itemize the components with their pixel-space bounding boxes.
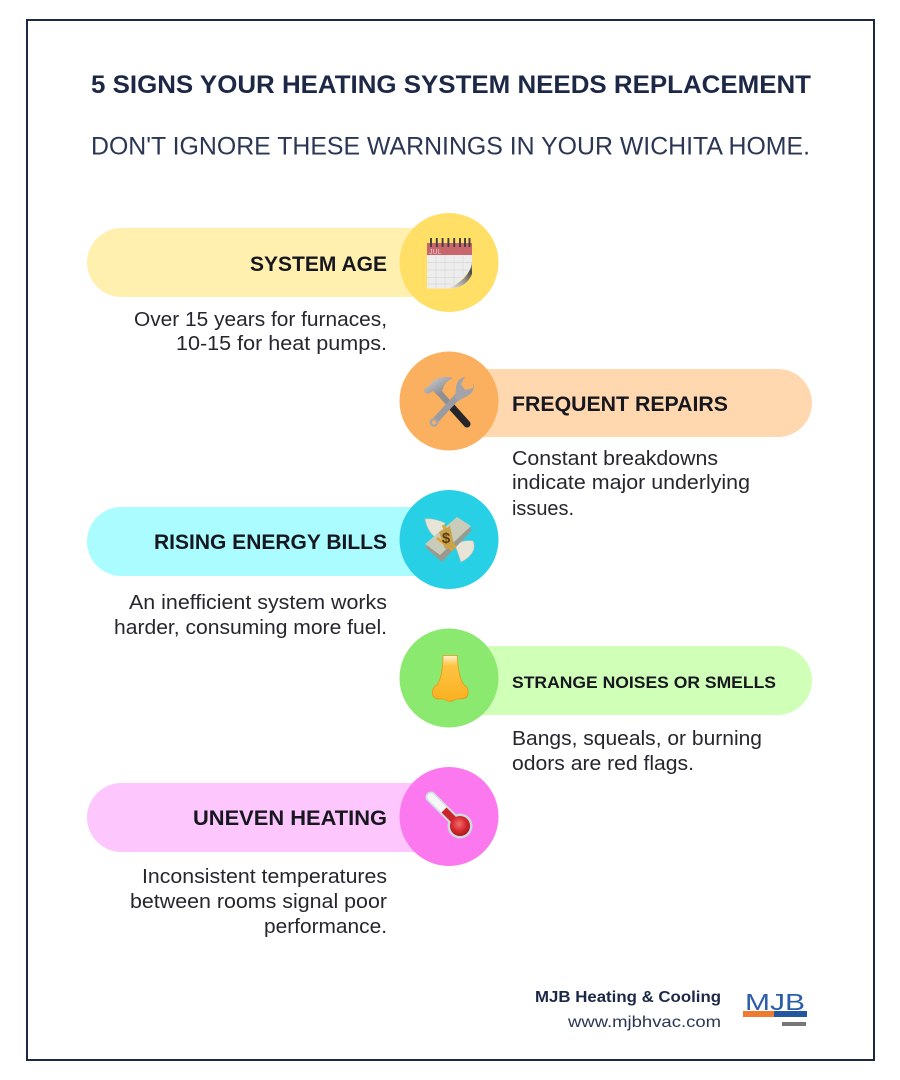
hammer handle (450, 405, 467, 424)
strange noises text (512, 728, 762, 775)
icon: calendar (427, 238, 472, 289)
icon: money with wings (425, 517, 474, 562)
uneven heating heading: UNEVEN HEATING (193, 807, 387, 830)
icon: thermometer (431, 797, 472, 838)
system age text: Over 15 years for furnaces, (134, 309, 387, 331)
rising energy bills circle (400, 490, 498, 589)
lower wing (455, 541, 474, 562)
frequent repairs text: Constant breakdowns (512, 448, 718, 470)
upper wing (425, 519, 445, 541)
icon: calendar: JUL (429, 249, 442, 256)
uneven heating text: between rooms signal poor (130, 891, 387, 913)
panel: frequent repairs (400, 352, 812, 520)
hammer head (424, 377, 453, 396)
wrench (433, 397, 457, 423)
panel: rising energy bills (87, 490, 498, 639)
uneven heating circle (400, 767, 498, 866)
system age pill (87, 228, 467, 297)
uneven heating pill (87, 783, 467, 852)
footer brand name: MJB Heating & Cooling (535, 989, 721, 1006)
icon: hammer and wrench (424, 377, 474, 426)
system age text (134, 309, 387, 355)
rising energy bills text (114, 592, 387, 639)
rising energy bills text: harder, consuming more fuel. (114, 617, 387, 639)
icon: nose (433, 656, 468, 701)
frequent repairs pill (432, 369, 812, 437)
system age heading: SYSTEM AGE (250, 253, 387, 276)
strange noises heading: STRANGE NOISES OR SMELLS (512, 673, 776, 692)
panel: strange noises or smells (400, 628, 812, 775)
frequent repairs text: issues. (512, 498, 574, 520)
rising energy bills text: An inefficient system works (129, 592, 387, 614)
uneven heating text: performance. (264, 916, 387, 938)
frequent repairs circle (400, 352, 498, 450)
footer website: www.mjbhvac.com (567, 1014, 721, 1031)
frequent repairs heading: FREQUENT REPAIRS (512, 393, 728, 416)
panel: uneven heating (87, 767, 498, 938)
rising energy bills heading: RISING ENERGY BILLS (154, 531, 387, 554)
uneven heating text: Inconsistent temperatures (142, 866, 387, 888)
strange noises text: Bangs, squeals, or burning (512, 728, 762, 750)
uneven heating text (130, 866, 387, 938)
title: 5 SIGNS YOUR HEATING SYSTEM NEEDS REPLACEMENT (91, 71, 811, 99)
subtitle: DON'T IGNORE THESE WARNINGS IN YOUR WICHITA HOME. (91, 132, 810, 160)
icon: MJB logo (743, 989, 807, 1026)
system age text: 10-15 for heat pumps. (176, 333, 387, 355)
system age circle (400, 213, 498, 312)
strange noises text: odors are red flags. (512, 753, 694, 775)
strange noises circle (400, 628, 498, 728)
icon: money with wings: $ (442, 530, 451, 547)
bill stack (425, 518, 472, 562)
thermometer bulb (450, 816, 470, 836)
frequent repairs text: indicate major underlying (512, 472, 750, 494)
hammer neck (438, 391, 451, 406)
panel: system age (87, 213, 498, 355)
strange noises pill (432, 646, 812, 715)
icon: MJB logo: MJB (745, 989, 805, 1015)
money band (437, 525, 455, 550)
frequent repairs text (512, 448, 750, 520)
rising energy bills pill (87, 507, 467, 576)
